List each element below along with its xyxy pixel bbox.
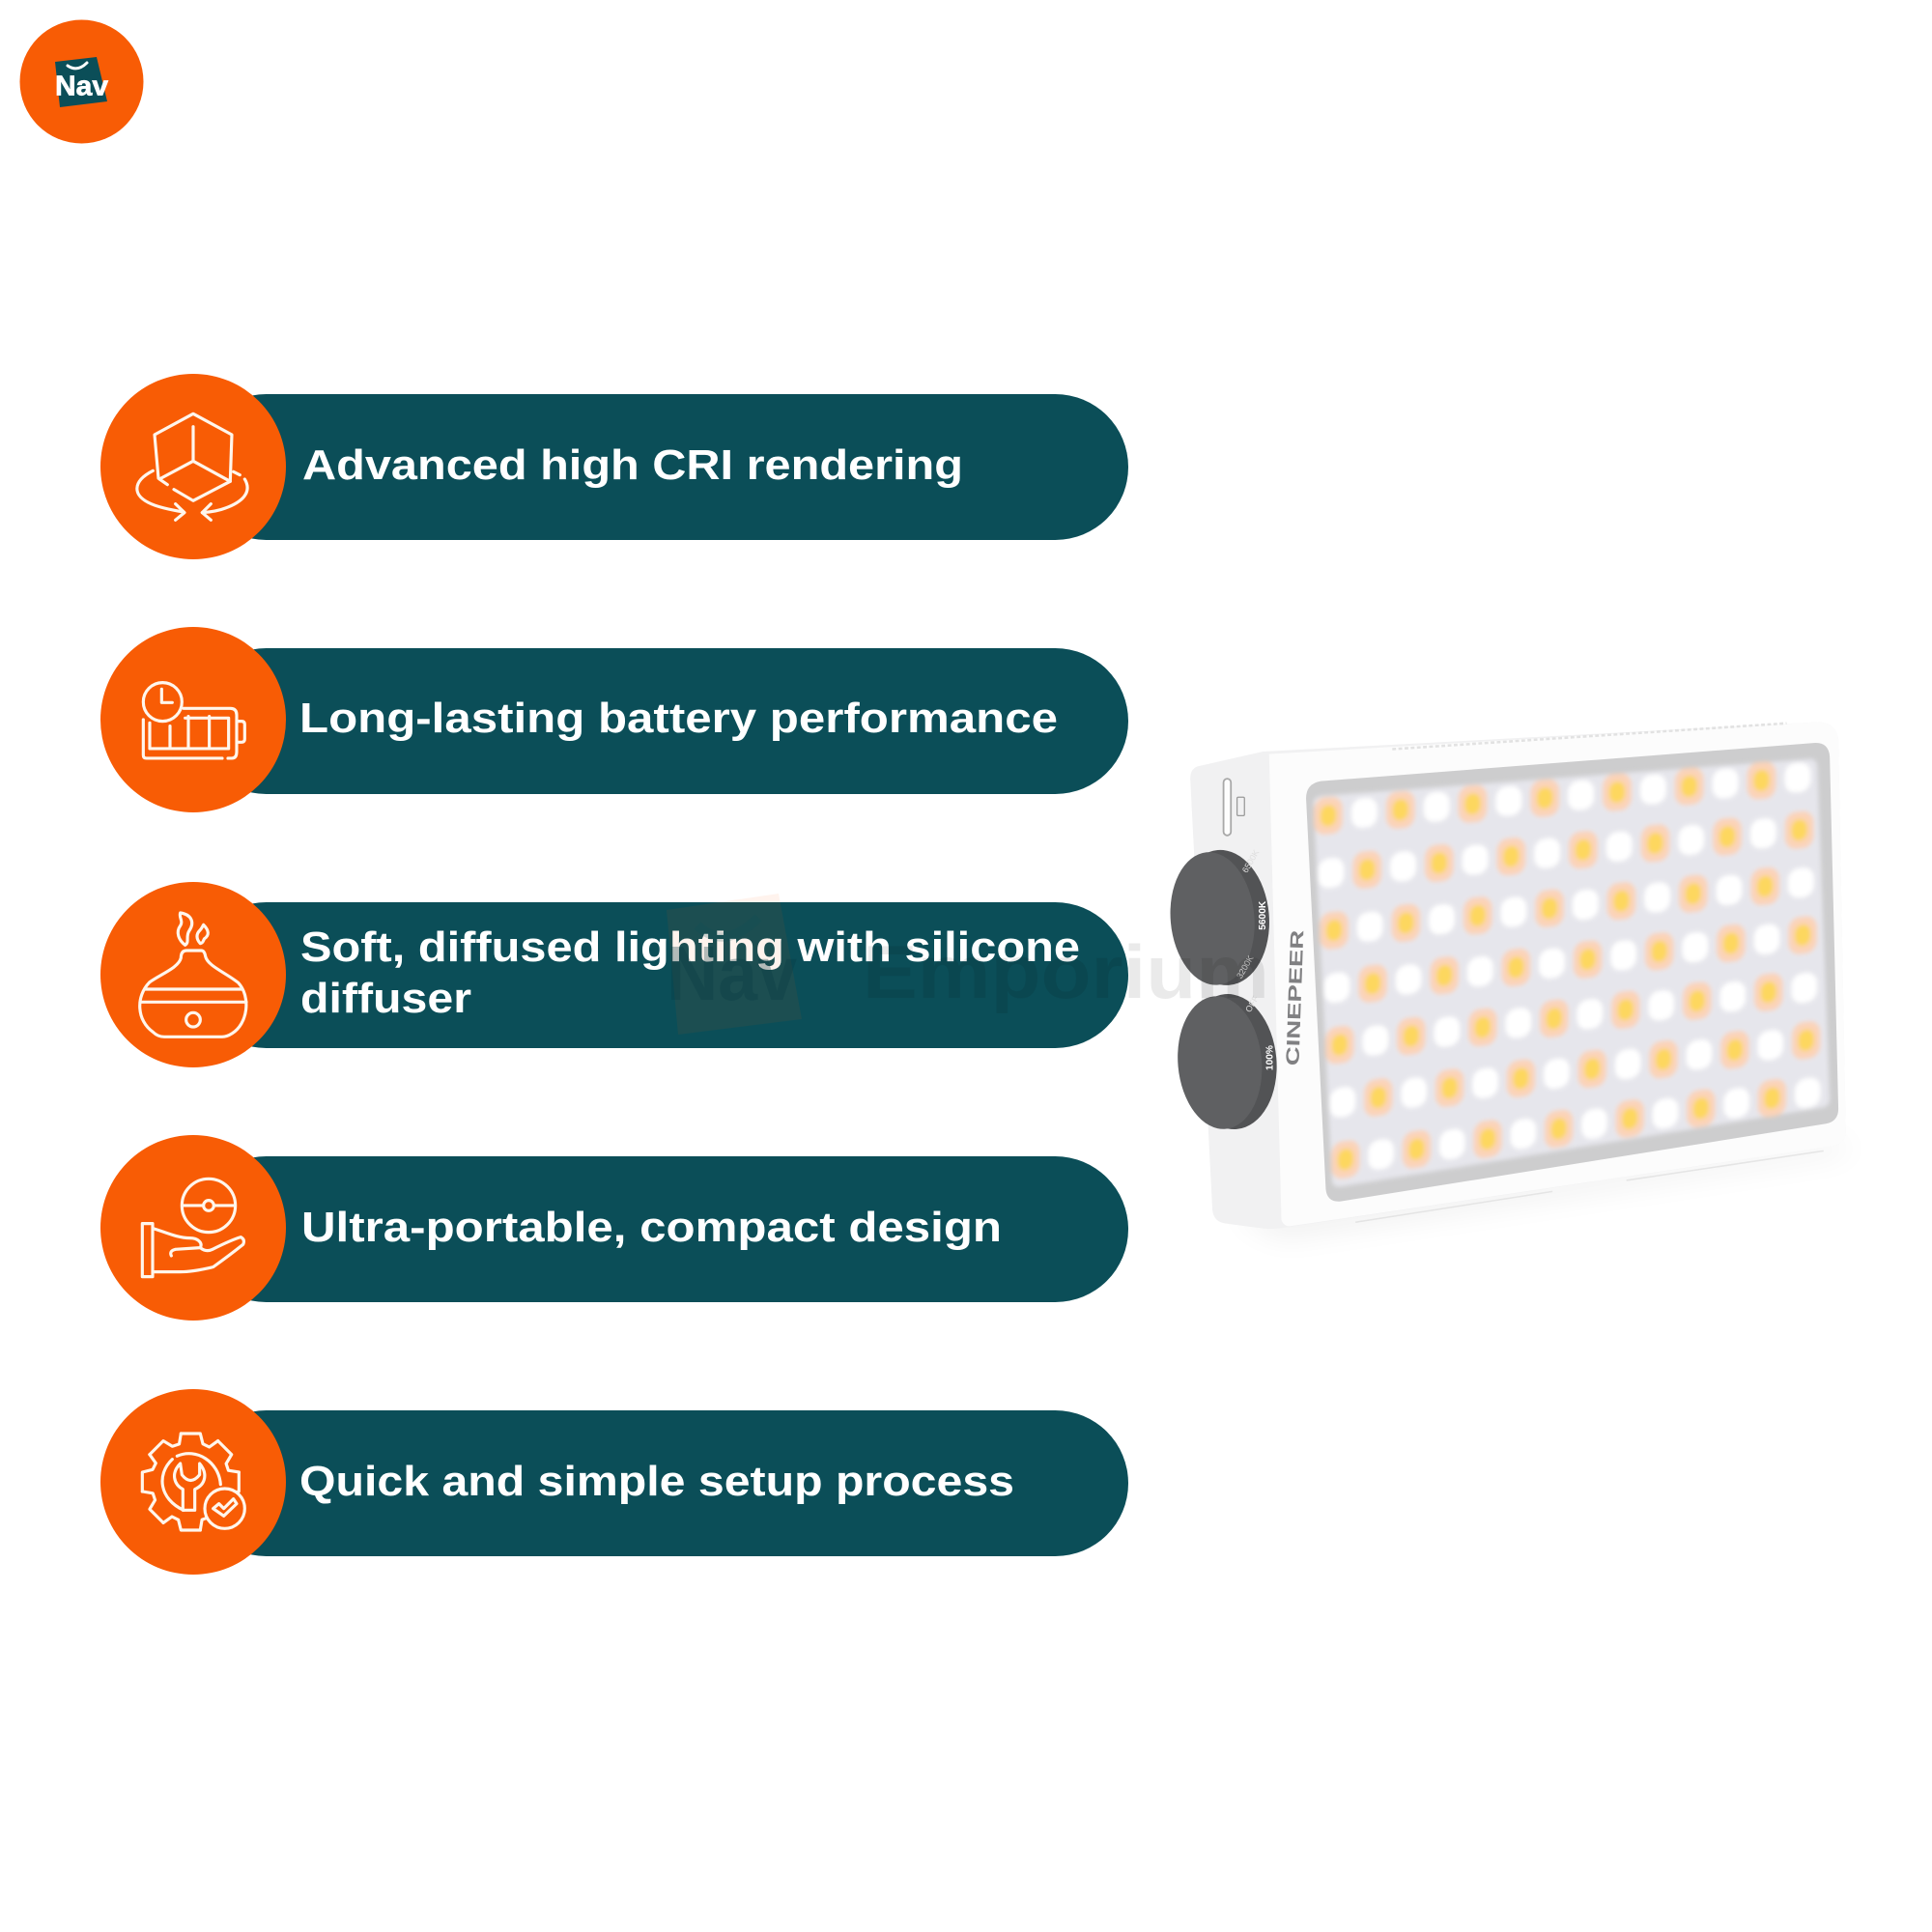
logo: Nav badge: Nav [55,71,108,102]
feature row 2: battery performance [100,627,1128,812]
watermark: Nav Emporium [667,894,1269,1035]
label: Advanced high CRI rendering [302,441,963,489]
upper dial [1165,846,1275,990]
icon: rotating cube [137,413,247,520]
upper dial: 3200K [1235,953,1256,980]
soft shadow [1233,1140,1855,1238]
feature row 3: diffused lighting [100,882,1128,1067]
label: Soft, diffused lighting with silicone [300,923,1080,971]
product: LED panel light [1165,722,1855,1238]
upper dial: 6500K [1240,848,1261,874]
feature row 1: high CRI rendering [100,374,1128,559]
label: Long-lasting battery performance [299,695,1058,742]
diffuser frame [1306,743,1838,1202]
LED matrix [1314,758,1830,1186]
lower dial: OFF [1243,994,1261,1014]
brand text: CINEPEER [1283,929,1308,1065]
icon: battery with clock [143,683,244,758]
logo: Nav badge [19,19,143,143]
label: Ultra-portable, compact design [301,1204,1002,1251]
feature row 4: portable design [100,1135,1128,1321]
watermark: Nav Emporium: Nav [667,930,797,1016]
feature row 5: setup process [100,1389,1128,1575]
feature row 3: diffused lighting: diffuser [300,975,471,1022]
label: Quick and simple setup process [299,1458,1014,1505]
USB port and battery mark [1224,779,1244,836]
lower dial: 100% [1264,1045,1275,1070]
lower dial [1172,990,1283,1134]
icon: hand holding disc [142,1179,243,1277]
icon: gear with wrench and check [137,1429,244,1535]
light body [1190,722,1846,1229]
icon: diffuser [140,913,246,1037]
upper dial: 5600K [1258,900,1268,930]
watermark: Nav Emporium: Emporium [863,929,1269,1014]
